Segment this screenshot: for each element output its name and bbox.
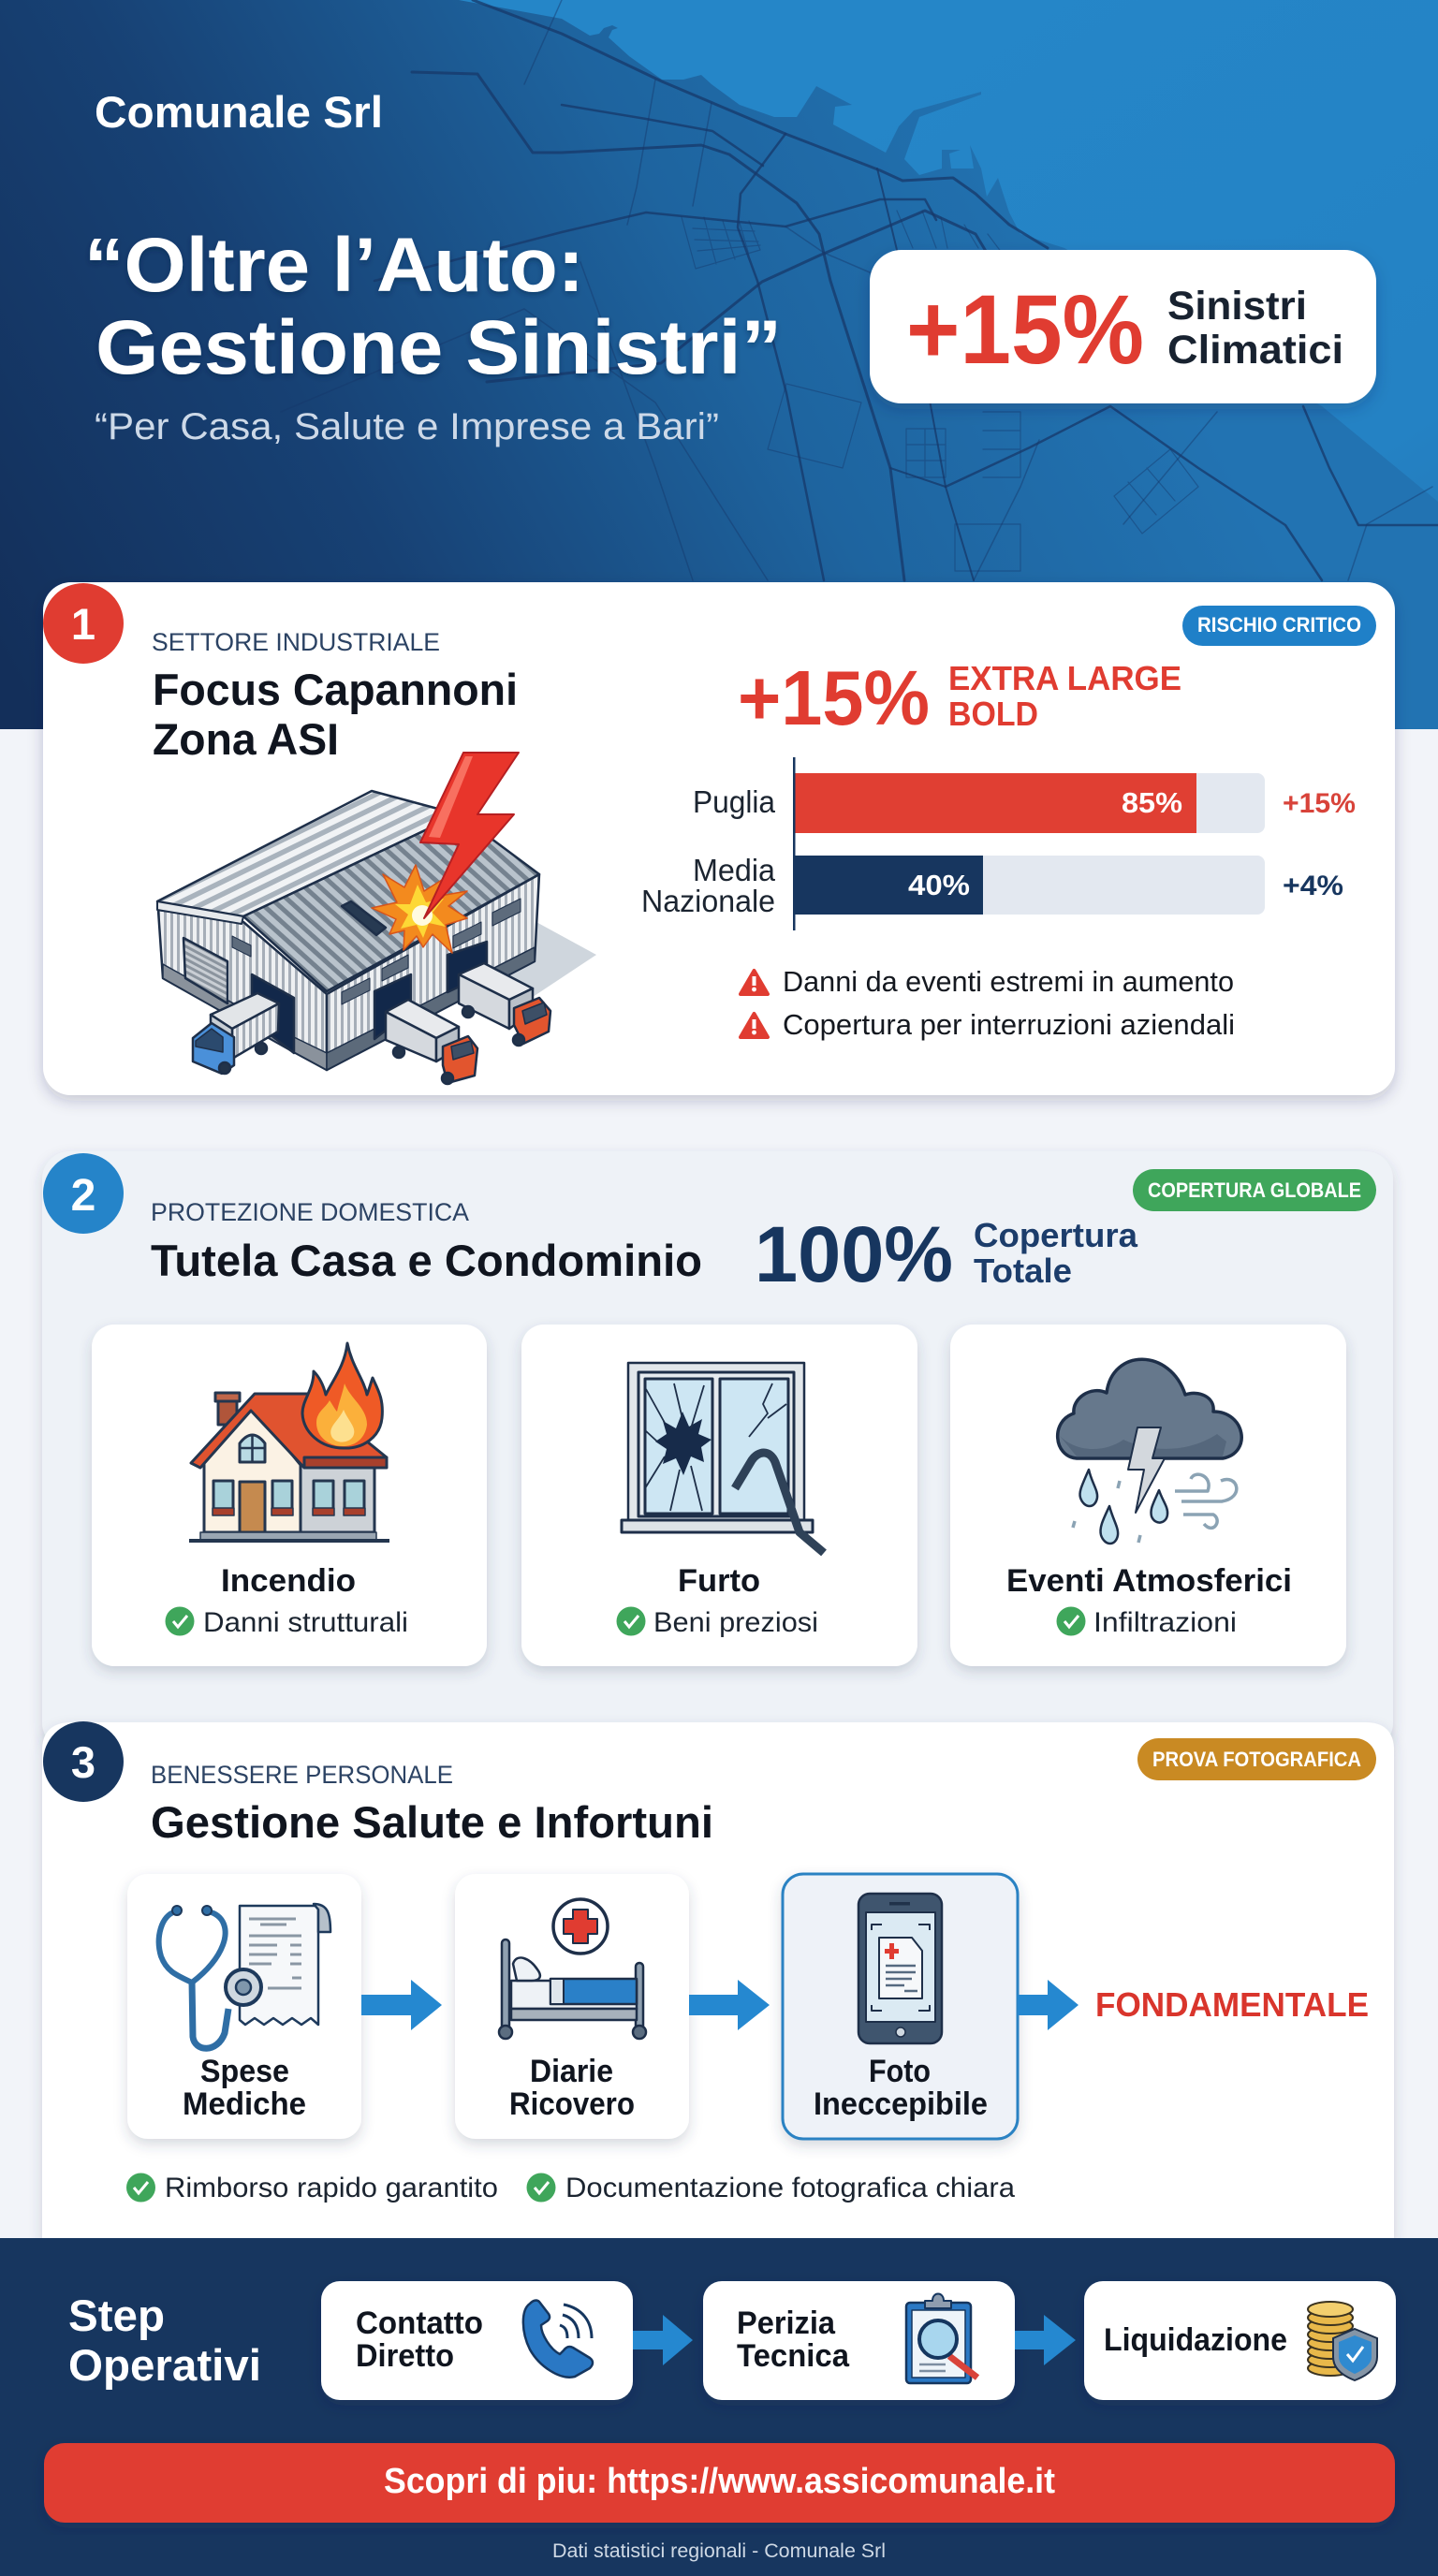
icon: storm cloud [1058,1359,1241,1544]
section 2 eyebrow: PROTEZIONE DOMESTICA [151,1198,469,1226]
icon: phone [523,2301,593,2378]
step: perizia tecnica: Tecnica [737,2338,850,2374]
callout: +15% sinistri climatici: Sinistri [1167,284,1307,329]
badge 2 [43,1153,124,1234]
furto label: Furto [678,1563,760,1599]
footer band: step operativi [0,2238,1438,2576]
icon: broken window with crowbar [622,1363,824,1553]
step card: foto ineccepibile [783,1874,1018,2139]
callout: +15% sinistri climatici: Climatici [1167,328,1343,373]
tag: rischio critico [1182,606,1376,646]
check: rimborso rapido: Rimborso rapido garantito [165,2173,498,2203]
badge 1 [43,583,124,664]
stat: +15% extra large bold: +15% [738,654,930,741]
arrow 1 [361,1980,442,2030]
truck: red right [459,963,550,1046]
check: danni strutturali: Danni strutturali [203,1607,408,1638]
call to action banner [44,2443,1395,2523]
section 1 heading [153,665,518,764]
tag: prova fotografica: PROVA FOTOGRAFICA [1152,1748,1361,1771]
tag: prova fotografica [1137,1738,1376,1780]
callout: +15% sinistri climatici [870,250,1376,403]
diarie ricovero label [509,2054,635,2122]
spese mediche label [183,2054,306,2122]
card: eventi atmosferici [950,1325,1346,1666]
arrow: perizia to liquidazione [1015,2315,1076,2365]
section 3 eyebrow: BENESSERE PERSONALE [151,1761,453,1789]
step operativi heading: Operativi [68,2340,261,2390]
icon: coins and shield [1308,2302,1377,2380]
badge 3: 3 [71,1737,95,1787]
stat: +15% extra large bold: BOLD [948,695,1038,733]
hero background with map of Bari [0,0,1438,729]
panel: section 3 salute e infortuni [42,1722,1394,2239]
bar chart: Puglia vs media nazionale: Nazionale [641,884,775,918]
bar chart: Puglia vs media nazionale: 85% [1122,786,1182,819]
truck: blue [193,993,279,1074]
bar chart: Puglia vs media nazionale: Media [693,853,776,887]
diarie ricovero label: Diarie [530,2054,613,2089]
panel: section 1 capannoni [43,582,1395,1095]
section 1 heading: Zona ASI [153,714,339,764]
section 1 eyebrow: SETTORE INDUSTRIALE [152,628,440,656]
hero title [84,223,782,390]
step card: spese mediche [127,1874,361,2139]
icon: hospital bed with cross [499,1899,646,2039]
eventi atmosferici label: Eventi Atmosferici [1006,1563,1292,1599]
hero title: “Oltre l’Auto: [84,223,584,308]
card: incendio [92,1325,487,1666]
foto ineccepibile label [814,2054,988,2122]
call to action banner: Scopri di piu: https://www.assicomunale.it [384,2462,1055,2501]
card: furto [521,1325,917,1666]
icon: clipboard with magnifier [906,2293,977,2383]
spese mediche label: Spese [200,2054,289,2089]
truck: red centre [386,1000,477,1084]
step: contatto diretto: Diretto [356,2338,454,2374]
diarie ricovero label: Ricovero [509,2086,635,2122]
step operativi heading [68,2291,261,2390]
foto ineccepibile label: Ineccepibile [814,2086,988,2122]
step: contatto diretto [321,2281,633,2400]
tag: copertura globale [1133,1169,1376,1211]
spese mediche label: Mediche [183,2086,306,2122]
stat: +15% extra large bold [738,654,1181,741]
hero subtitle: “Per Casa, Salute e Imprese a Bari” [95,406,719,447]
badge 3 [43,1721,124,1802]
step: perizia tecnica: Perizia [737,2305,836,2341]
label: fondamentale: FONDAMENTALE [1095,1985,1369,2024]
bar chart: Puglia vs media nazionale: +4% [1283,871,1343,901]
step operativi heading: Step [68,2291,165,2340]
arrow 2 [689,1980,770,2030]
stat: +15% extra large bold: EXTRA LARGE [948,659,1181,697]
incendio label: Incendio [221,1563,356,1599]
tag: copertura globale: COPERTURA GLOBALE [1148,1178,1361,1202]
icon: smartphone with document photo [858,1894,942,2043]
hero title: Gestione Sinistri” [95,305,782,390]
icon: house on fire [189,1343,389,1541]
bar chart: Puglia vs media nazionale [641,757,1356,930]
arrow: contatto to perizia [633,2315,693,2365]
icon: isometric warehouse struck by lightning [157,753,596,1084]
stat: 100%: 100% [755,1210,953,1298]
icon: stethoscope and receipt [159,1904,330,2048]
section 1 heading: Focus Capannoni [153,665,518,714]
logo: Comunale Srl: Comunale Srl [95,87,383,137]
step: perizia tecnica [703,2281,1015,2400]
badge 2: 2 [71,1171,95,1221]
check: documentazione fotografica: Documentazione fotografica chiara [565,2173,1015,2203]
badge 1: 1 [71,599,95,649]
bar chart: Puglia vs media nazionale: +15% [1283,788,1356,819]
callout: +15% sinistri climatici: +15% [906,275,1144,385]
stat label: copertura totale: Copertura [974,1216,1138,1254]
arrow 3 [1018,1980,1078,2030]
step card: diarie ricovero [455,1874,689,2139]
tag: rischio critico: RISCHIO CRITICO [1197,613,1361,637]
section 3 heading: Gestione Salute e Infortuni [151,1797,713,1847]
bar chart: Puglia vs media nazionale: Puglia [693,784,776,819]
section 2 heading: Tutela Casa e Condominio [151,1236,702,1285]
check: infiltrazioni: Infiltrazioni [1093,1607,1237,1638]
stat label: copertura totale [974,1216,1138,1290]
bar chart: Puglia vs media nazionale: 40% [908,869,970,901]
warning: copertura interruzioni: Copertura per interruzioni aziendali [783,1008,1235,1041]
foto ineccepibile label: Foto [869,2054,931,2089]
footnote: Dati statistici regionali - Comunale Srl [552,2540,886,2562]
step: liquidazione [1084,2281,1396,2400]
check: beni preziosi: Beni preziosi [653,1607,818,1638]
warning: danni da eventi estremi: Danni da eventi estremi in aumento [783,965,1234,998]
stat label: copertura totale: Totale [974,1251,1072,1290]
step: liquidazione: Liquidazione [1104,2322,1287,2358]
panel: section 2 casa e condominio [42,1151,1393,1750]
step: contatto diretto: Contatto [356,2305,483,2341]
